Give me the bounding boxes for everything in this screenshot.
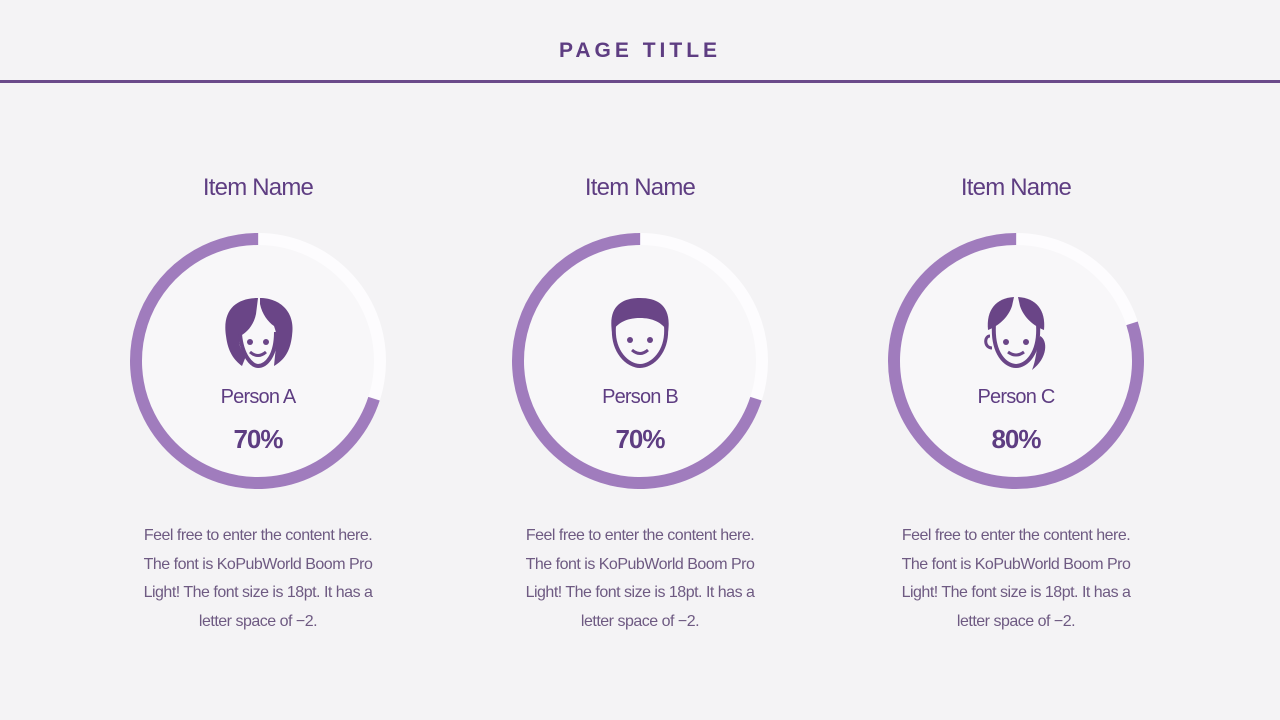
panel: person B (512, 174, 768, 630)
panel: person A (130, 174, 386, 630)
text block: The font is KoPubWorld Boom Pro (144, 556, 372, 573)
text block (526, 527, 755, 630)
text block: Feel free to enter the content here. (902, 527, 1130, 544)
heading: Item Name (585, 174, 695, 201)
icon: woman ponytail (984, 297, 1046, 370)
percent: 70% (615, 424, 665, 454)
title: PAGE TITLE (559, 39, 721, 62)
label: Person C (978, 386, 1054, 408)
ring chart (888, 233, 1144, 489)
icon: boy (611, 298, 669, 368)
text block: Light! The font size is 18pt. It has a (526, 584, 754, 601)
ring chart (512, 233, 768, 489)
label: Person B (602, 386, 678, 408)
text block: Feel free to enter the content here. (144, 527, 372, 544)
heading: Item Name (961, 174, 1071, 201)
text block: Light! The font size is 18pt. It has a (144, 584, 372, 601)
panel: person C (888, 174, 1144, 630)
ring chart (130, 233, 386, 489)
heading: Item Name (203, 174, 313, 201)
percent: 80% (991, 424, 1041, 454)
text block: Light! The font size is 18pt. It has a (902, 584, 1130, 601)
text block (902, 527, 1131, 630)
text block (144, 527, 373, 630)
text block: The font is KoPubWorld Boom Pro (526, 556, 754, 573)
text block: letter space of −2. (957, 613, 1075, 630)
text block: letter space of −2. (199, 613, 317, 630)
text block: The font is KoPubWorld Boom Pro (902, 556, 1130, 573)
label: Person A (221, 386, 295, 408)
text block: letter space of −2. (581, 613, 699, 630)
percent: 70% (233, 424, 283, 454)
icon: woman short hair (225, 298, 292, 368)
text block: Feel free to enter the content here. (526, 527, 754, 544)
